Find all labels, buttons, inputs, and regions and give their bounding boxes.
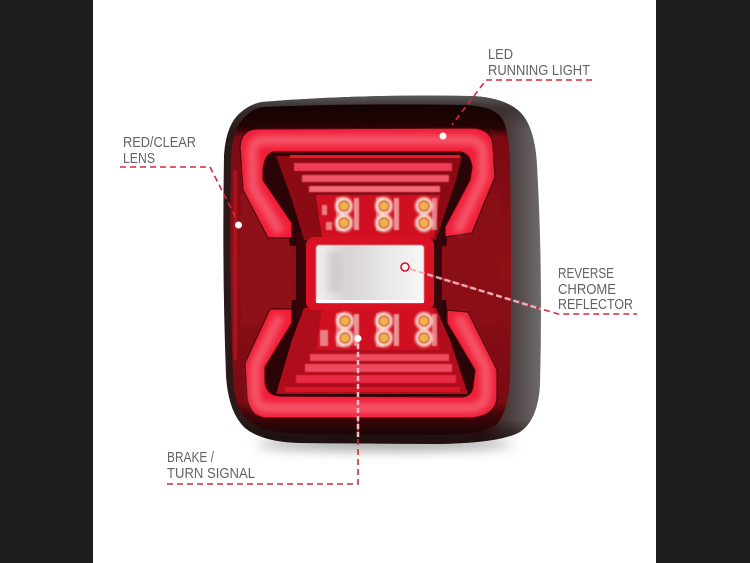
callout: red/clear lens: RED/CLEAR bbox=[123, 135, 196, 151]
reverse reflector frame bbox=[306, 237, 434, 310]
central side columns bbox=[296, 232, 442, 318]
outer housing bbox=[223, 96, 541, 444]
callout: red/clear lens bbox=[120, 135, 242, 228]
right reflector panel bbox=[445, 195, 499, 325]
upper light bar bbox=[240, 128, 495, 238]
callout: LED running light: RUNNING LIGHT bbox=[488, 63, 590, 79]
callout: brake / turn signal bbox=[167, 335, 362, 484]
left reflector panel bbox=[241, 195, 293, 325]
tail light ground shadow bbox=[257, 438, 513, 450]
upper dark recess bbox=[262, 153, 474, 246]
upper recess glow bbox=[276, 156, 462, 240]
right dark side band bbox=[656, 0, 750, 563]
lower light bar bbox=[245, 309, 497, 418]
inner lens body bbox=[230, 104, 511, 435]
callout: red/clear lens: LENS bbox=[123, 151, 155, 167]
callout: reverse chrome reflector: CHROME bbox=[558, 282, 616, 298]
left lens edge glow bbox=[234, 170, 236, 360]
reverse chrome reflector bbox=[316, 245, 424, 303]
callout: brake / turn signal: TURN SIGNAL bbox=[167, 466, 255, 482]
lower LED cluster bbox=[316, 308, 440, 350]
tail light assembly bbox=[223, 96, 541, 444]
lower reflector slats bbox=[285, 354, 460, 392]
lower recess glow bbox=[276, 308, 468, 394]
lower dark recess bbox=[262, 300, 476, 396]
callout: reverse chrome reflector bbox=[401, 263, 637, 314]
upper LED cluster bbox=[316, 195, 440, 238]
housing top and bottom shading bbox=[223, 96, 541, 444]
left dark side band bbox=[0, 0, 93, 563]
callout: LED running light: LED bbox=[488, 47, 513, 63]
upper reflector slats bbox=[290, 155, 460, 192]
callout: reverse chrome reflector: REFLECTOR bbox=[558, 297, 633, 313]
callout: LED running light bbox=[440, 47, 592, 140]
callout: brake / turn signal: BRAKE / bbox=[167, 450, 215, 466]
callout: reverse chrome reflector: REVERSE bbox=[558, 266, 614, 282]
